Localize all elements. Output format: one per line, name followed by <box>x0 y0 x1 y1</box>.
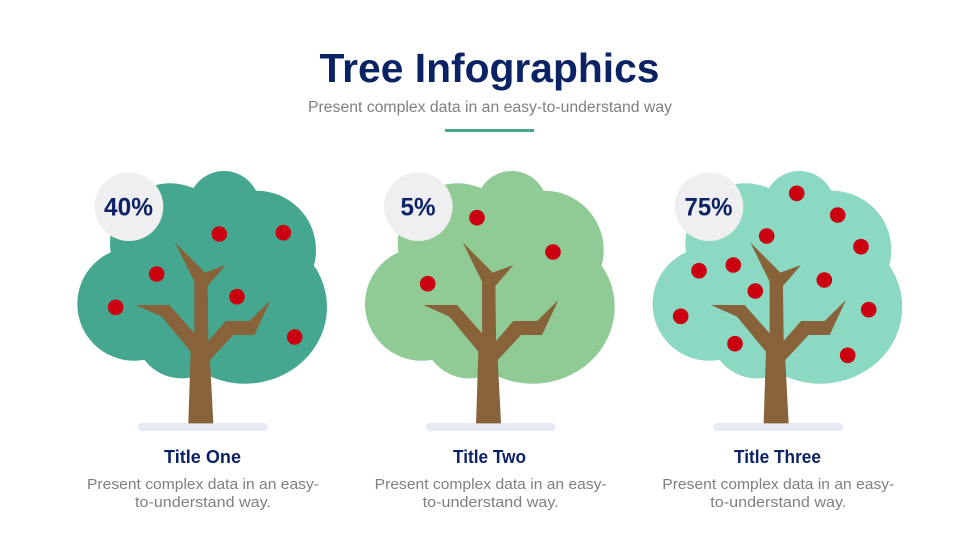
tree title: Title One <box>164 447 241 467</box>
ground shadow <box>713 423 843 431</box>
percentage badge <box>95 172 163 241</box>
percentage badge: 75% <box>684 194 732 222</box>
tree description: Present complex data in an easy- <box>375 476 607 493</box>
apples <box>420 210 561 292</box>
tree trunk and branches <box>423 242 558 423</box>
percentage badge: 40% <box>104 194 153 222</box>
tree description: to-understand way. <box>135 494 271 511</box>
tree description: Present complex data in an easy- <box>662 476 894 493</box>
percentage badge: 5% <box>400 194 436 222</box>
tree description: to-understand way. <box>710 494 846 511</box>
panel: tree two <box>365 171 615 511</box>
tree trunk and branches <box>711 242 846 423</box>
tree trunk and branches <box>136 242 271 423</box>
panel: tree one <box>77 171 327 511</box>
title: Tree Infographics <box>320 45 660 91</box>
tree title: Title Two <box>453 447 526 467</box>
percentage badge <box>384 172 453 241</box>
apples <box>673 186 876 363</box>
tree description <box>87 476 319 511</box>
tree description <box>375 476 607 511</box>
panel: tree three <box>653 171 902 511</box>
tree canopy <box>77 171 327 384</box>
apples <box>108 225 303 345</box>
accent underline <box>445 129 534 132</box>
tree description: to-understand way. <box>423 494 559 511</box>
tree description: Present complex data in an easy- <box>87 476 319 493</box>
percentage badge <box>675 172 743 241</box>
ground shadow <box>426 423 556 431</box>
tree description <box>662 476 894 511</box>
subtitle: Present complex data in an easy-to-understand way <box>308 99 672 116</box>
ground shadow <box>138 423 268 431</box>
tree canopy <box>653 171 902 384</box>
tree canopy <box>365 171 615 384</box>
tree title: Title Three <box>734 447 821 467</box>
